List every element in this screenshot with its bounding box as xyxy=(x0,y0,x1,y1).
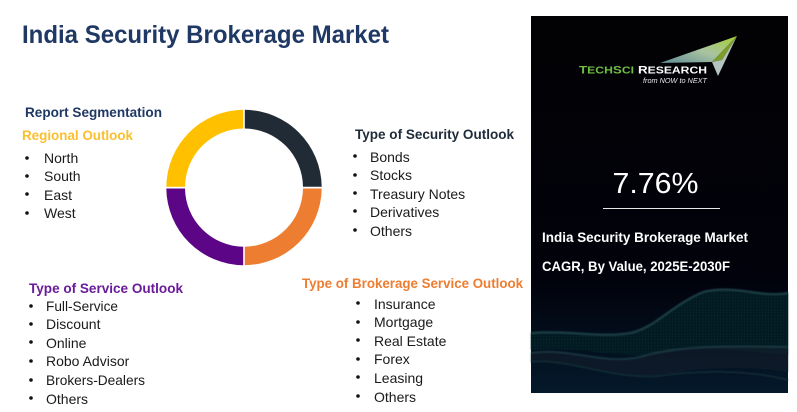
heading: report segmentation: Report Segmentation xyxy=(25,104,162,120)
panel: type of brokerage service outlook xyxy=(302,275,523,405)
list: brokerage service types: Insurance xyxy=(374,296,436,312)
list: brokerage service types: Mortgage xyxy=(374,314,433,330)
list: service types: Full-Service xyxy=(46,298,118,314)
logo: TechSci Research: RESEARCH xyxy=(638,64,707,76)
heading: type of service outlook: Type of Service Outlook xyxy=(29,280,183,296)
caption: market name: India Security Brokerage Market xyxy=(542,229,748,245)
logo: TechSci Research xyxy=(579,36,737,85)
segment: yellow xyxy=(166,110,243,187)
heading: type of security outlook: Type of Security Outlook xyxy=(355,126,514,142)
list: security types: Treasury Notes xyxy=(370,186,465,202)
icon: paper plane xyxy=(660,36,737,76)
list: regions xyxy=(25,150,81,221)
title: India Security Brokerage Market xyxy=(22,21,390,49)
list: regions: East xyxy=(44,187,72,203)
panel: type of security outlook xyxy=(353,126,514,239)
logo: TechSci Research: from NOW to NEXT xyxy=(643,78,708,85)
segment: purple xyxy=(166,188,243,265)
metric: CAGR value: 7.76% xyxy=(612,168,698,200)
list: security types: Others xyxy=(370,223,412,239)
list: brokerage service types: Forex xyxy=(374,351,410,367)
panel: regional outlook xyxy=(22,127,133,221)
heading: type of brokerage service outlook: Type of Brokerage Service Outlook xyxy=(302,275,523,291)
list: security types: Stocks xyxy=(370,167,412,183)
divider xyxy=(603,208,720,209)
list: regions: North xyxy=(44,150,78,166)
list: brokerage service types: Real Estate xyxy=(374,333,447,349)
list: service types: Robo Advisor xyxy=(46,353,130,369)
segment: dark navy xyxy=(245,110,322,187)
segment: orange xyxy=(245,188,322,265)
list: regions: West xyxy=(44,205,76,221)
list: security types xyxy=(353,149,465,239)
panel: type of service outlook xyxy=(29,280,183,407)
list: service types: Discount xyxy=(46,316,101,332)
list: security types: Derivatives xyxy=(370,204,439,220)
list: service types: Others xyxy=(46,391,88,407)
list: regions: South xyxy=(44,168,81,184)
logo text: TECH SCI xyxy=(579,64,634,76)
panel: CAGR dark background xyxy=(531,16,788,393)
list: brokerage service types: Leasing xyxy=(374,370,423,386)
list: brokerage service types xyxy=(356,296,447,405)
wave texture xyxy=(531,289,788,380)
list: brokerage service types: Others xyxy=(374,389,416,405)
list: service types xyxy=(29,298,145,407)
list: security types: Bonds xyxy=(370,149,410,165)
heading: regional outlook: Regional Outlook xyxy=(22,127,133,143)
list: service types: Brokers-Dealers xyxy=(46,372,145,388)
caption: CAGR description: CAGR, By Value, 2025E-2030F xyxy=(542,258,730,274)
list: service types: Online xyxy=(46,335,87,351)
donut chart xyxy=(166,110,322,265)
